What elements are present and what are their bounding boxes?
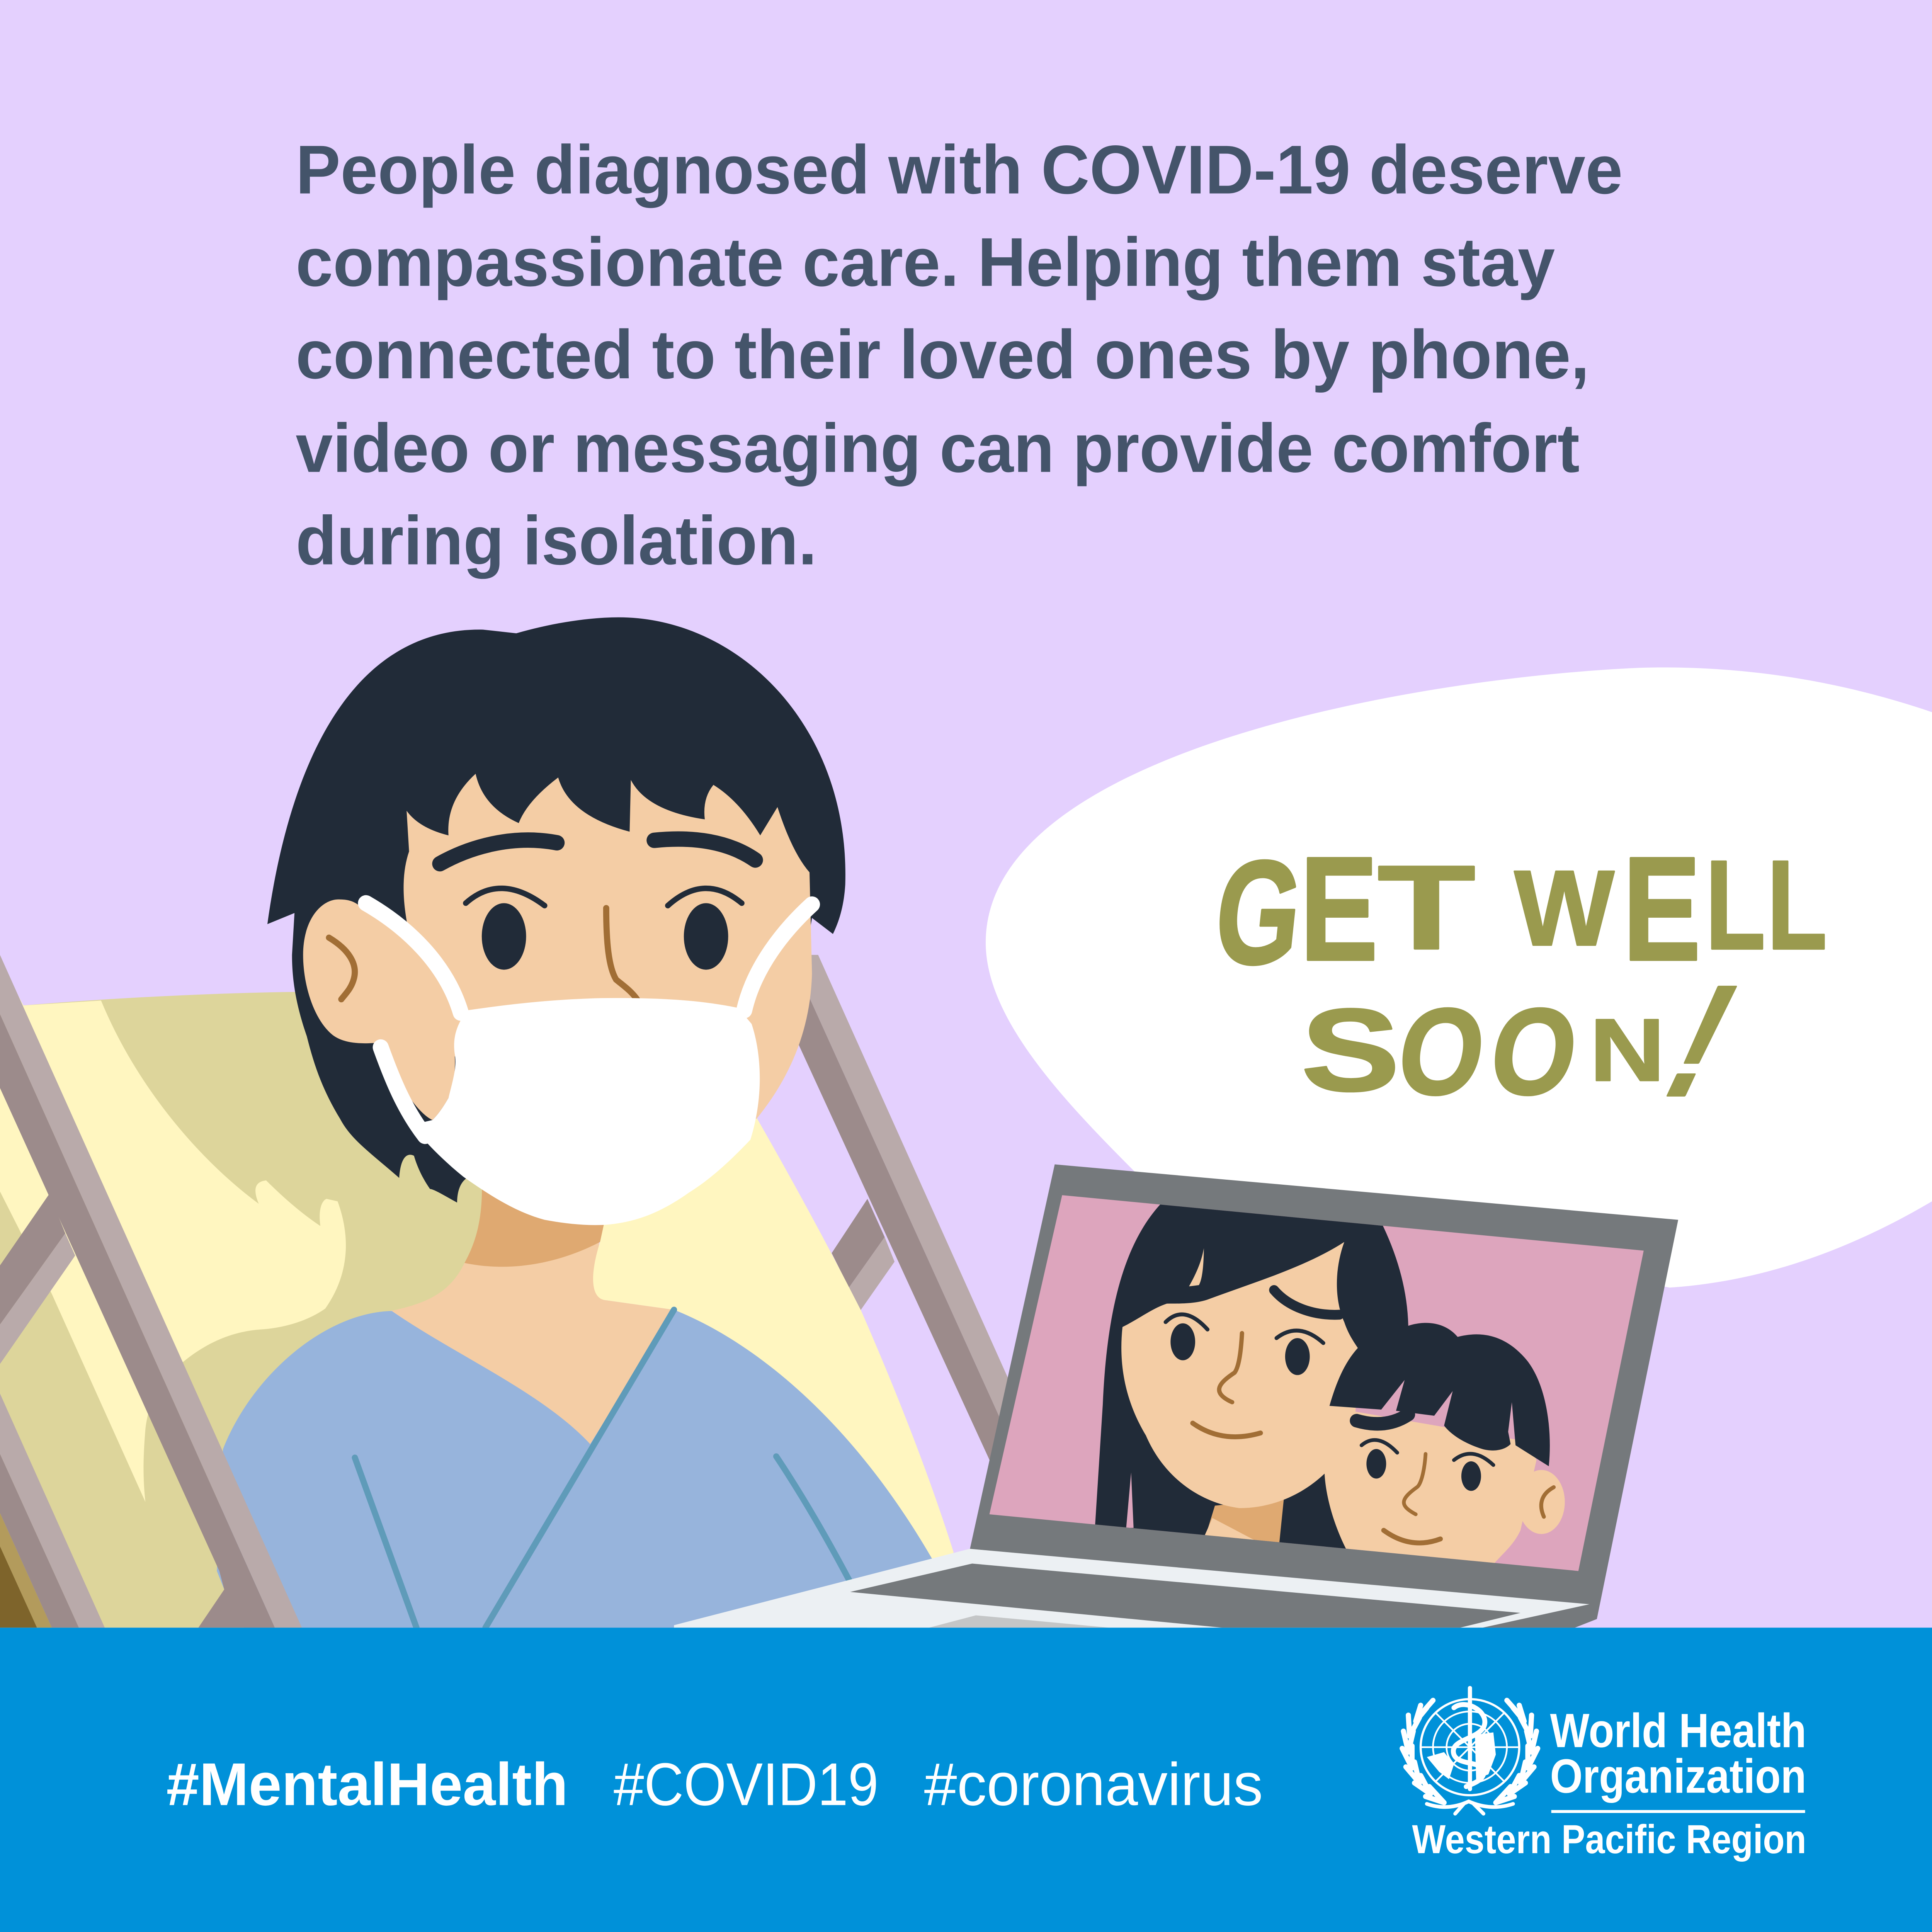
hair back (267, 617, 845, 1202)
eyes (466, 888, 742, 970)
get well soon lettering (1208, 827, 1827, 1129)
video call faces (1094, 1201, 1565, 1567)
woman (1094, 1201, 1408, 1555)
get well soon lettering: G (1208, 830, 1310, 995)
laptop lid (970, 1164, 1678, 1619)
get well soon lettering: W (1514, 848, 1615, 968)
face mask (366, 903, 812, 1225)
heading text: connected to their loved ones by phone, (296, 316, 1590, 393)
left bed rails (0, 955, 302, 1628)
face (404, 774, 812, 1146)
right bed rail (789, 955, 1023, 1479)
WHO wordmark: Western Pacific Region (1412, 1817, 1806, 1862)
hashtags: #coronavirus (924, 1751, 1263, 1818)
WHO wordmark (1412, 1704, 1806, 1862)
heading text (296, 131, 1623, 579)
hashtags: #COVID19 (614, 1751, 879, 1818)
WHO wordmark: World Health (1550, 1704, 1806, 1758)
heading text: compassionate care. Helping them stay (296, 223, 1555, 301)
laptop base (1454, 1604, 1597, 1633)
hashtags (166, 1751, 1263, 1818)
heading text: People diagnosed with COVID-19 deserve (296, 131, 1623, 208)
get well soon lettering: L (1705, 834, 1765, 976)
WHO logo (1402, 1688, 1806, 1862)
illustration: patient in bed (0, 617, 1678, 1633)
eyebrows (440, 839, 755, 864)
get well soon lettering: L (1767, 834, 1827, 976)
hashtags: #MentalHealth (166, 1751, 568, 1818)
get well soon lettering: S (1301, 985, 1400, 1116)
heading text: during isolation. (296, 502, 817, 579)
heading text: video or messaging can provide comfort (296, 409, 1580, 486)
get well soon lettering: E (1623, 827, 1701, 992)
neck shadow (464, 1177, 606, 1267)
WHO emblem (1402, 1688, 1538, 1814)
speech bubble (986, 667, 1932, 1287)
pillow (0, 961, 954, 1628)
get well soon lettering: T (1378, 840, 1475, 974)
get well soon lettering: O (1390, 983, 1493, 1121)
WHO wordmark: Organization (1550, 1750, 1806, 1803)
get well soon lettering: O (1482, 983, 1586, 1121)
neck and chest (392, 1183, 674, 1444)
get well soon lettering: N (1590, 1001, 1665, 1100)
patient gown (217, 1310, 933, 1633)
get well soon lettering: ! (1640, 953, 1764, 1129)
laptop screen (990, 1195, 1644, 1571)
child (1325, 1323, 1565, 1567)
footer band (0, 1628, 1932, 1932)
get well soon lettering: E (1300, 827, 1378, 992)
nose (606, 908, 637, 999)
ear (303, 900, 455, 1120)
laptop (674, 1164, 1678, 1633)
